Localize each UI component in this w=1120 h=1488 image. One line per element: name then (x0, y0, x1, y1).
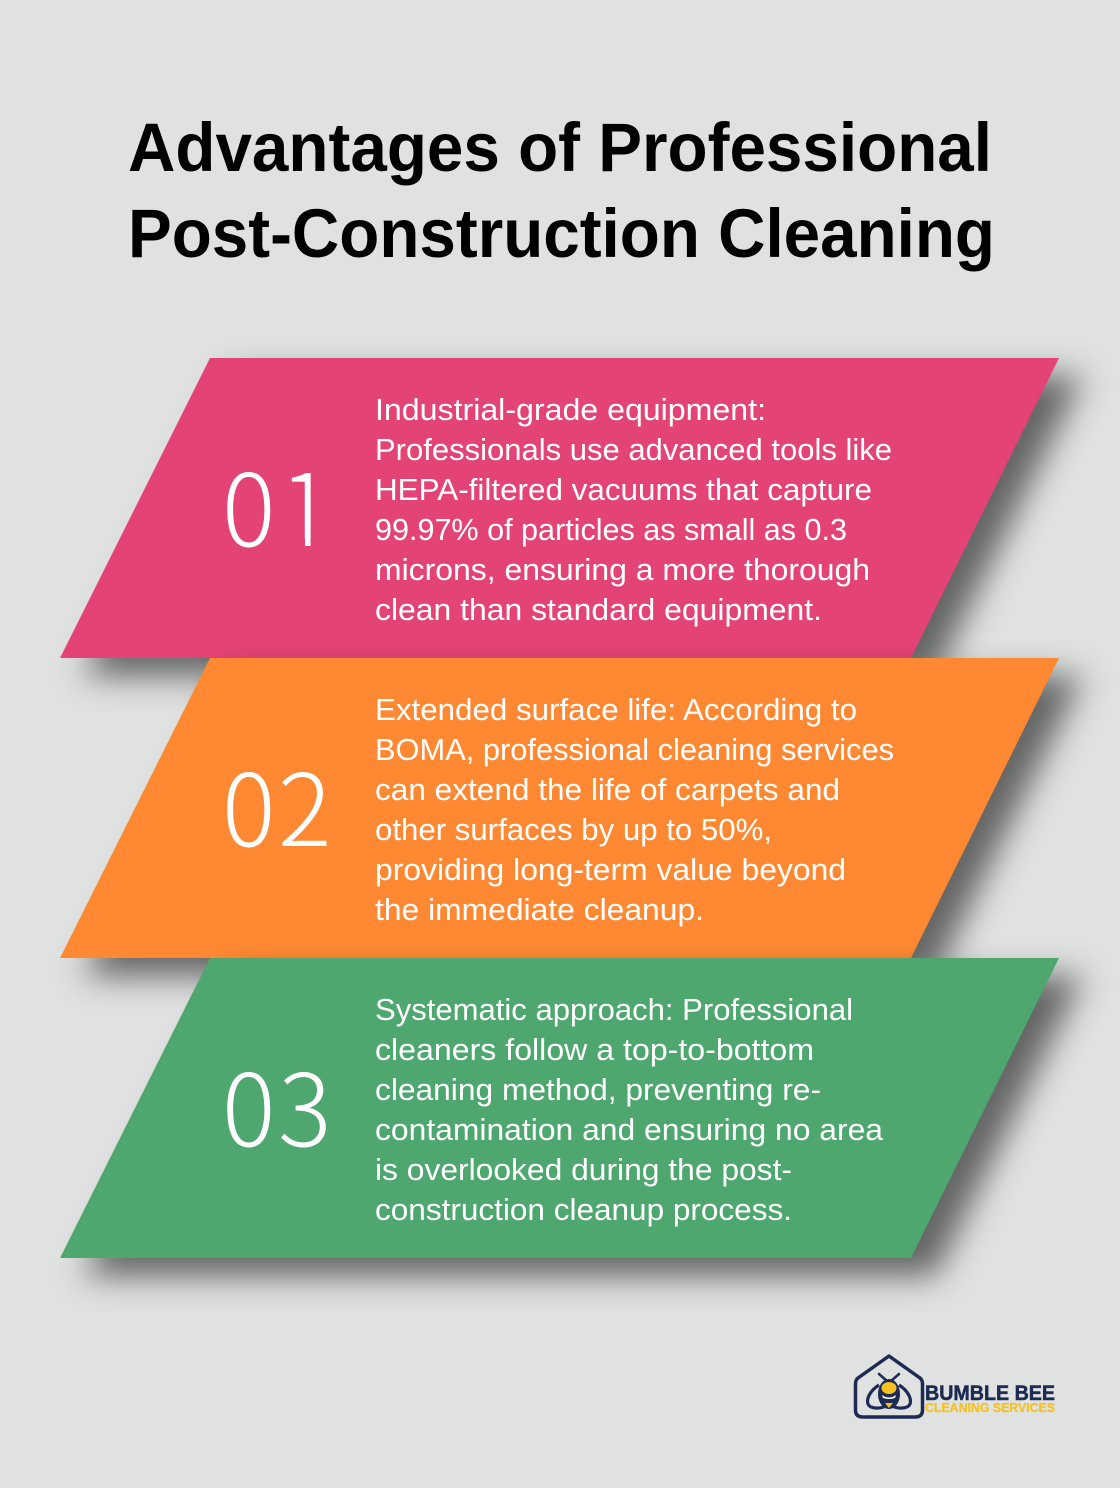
title: Advantages of Professional (128, 109, 992, 186)
text: step 01 description: clean than standard equipment. (375, 592, 822, 627)
text: step 02 description: can extend the life of carpets and (375, 772, 840, 807)
logo tagline: CLEANING SERVICES (925, 1401, 1055, 1415)
text: step 03 description: cleaning method, preventing re- (375, 1072, 821, 1107)
text: step 03 description: construction cleanup process. (375, 1192, 792, 1227)
text: step 01 description (375, 392, 892, 627)
panel: step 02 extended surface life (60, 658, 1083, 976)
number 03: 03 (222, 1030, 332, 1175)
title: Post-Construction Cleaning (128, 195, 995, 272)
text: step 01 description: HEPA-filtered vacuums that capture (375, 472, 872, 507)
panel: step 03 systematic approach (60, 958, 1083, 1276)
text: step 02 description: BOMA, professional cleaning services (375, 732, 894, 767)
text: step 02 description (375, 692, 894, 927)
text: step 01 description: Industrial-grade equipment: (375, 392, 766, 427)
text: step 03 description: cleaners follow a top-to-bottom (375, 1032, 814, 1067)
icon: house with bee (856, 1356, 922, 1417)
text: step 01 description: microns, ensuring a more thorough (375, 552, 870, 587)
text: step 01 description: Professionals use advanced tools like (375, 432, 892, 467)
number 02: 02 (222, 730, 332, 875)
text: step 01 description: 99.97% of particles as small as 0.3 (375, 512, 847, 547)
text: step 03 description: Systematic approach: Professional (375, 992, 853, 1027)
text: step 03 description (375, 992, 884, 1227)
text: step 02 description: providing long-term value beyond (375, 852, 846, 887)
text: step 02 description: other surfaces by up to 50%, (375, 812, 772, 847)
title (128, 109, 995, 272)
text: step 03 description: contamination and ensuring no area (375, 1112, 884, 1147)
number 01: 01 (222, 430, 332, 575)
panel: step 01 industrial-grade equipment (60, 358, 1083, 676)
logo: Bumble Bee Cleaning Services (856, 1356, 1055, 1417)
text: step 03 description: is overlooked during the post- (375, 1152, 792, 1187)
text: step 02 description: Extended surface life: According to (375, 692, 857, 727)
text: step 02 description: the immediate cleanup. (375, 892, 704, 927)
logo wordmark: BUMBLE BEE (925, 1382, 1055, 1405)
